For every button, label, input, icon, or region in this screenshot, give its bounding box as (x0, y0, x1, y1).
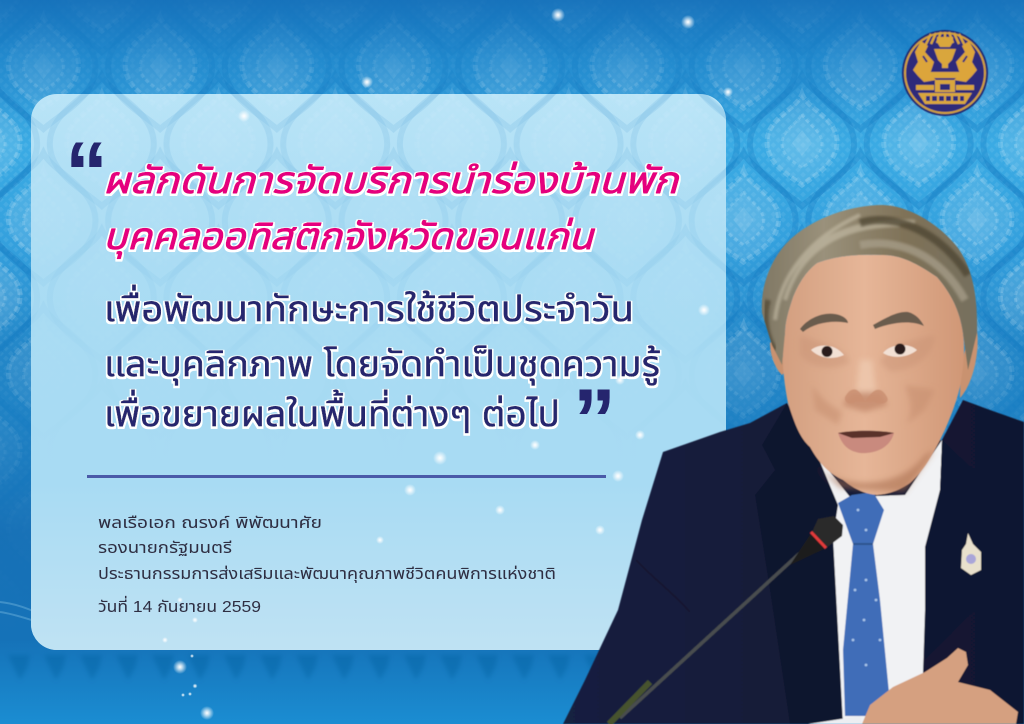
attribution text: ประธานกรรมการส่งเสริมและพัฒนาคุณภาพชีวิตคนพิการแห่งชาติ (98, 565, 556, 583)
headline in pink: ผลักดันการจัดบริการนำร่องบ้านพัก (103, 160, 680, 201)
microphone stem (620, 553, 800, 718)
seal base (916, 72, 974, 92)
lapel pin (961, 533, 981, 575)
tie knot crease (853, 543, 873, 545)
shirt cuff (808, 716, 862, 724)
seal rays (925, 32, 965, 46)
face (783, 255, 964, 495)
sleeve fold (636, 560, 690, 612)
left lapel (755, 403, 842, 724)
shirt (818, 440, 942, 724)
attribution text (98, 515, 556, 616)
headline in pink: บุคคลออทิสติกจังหวัดขอนแก่น (103, 216, 596, 259)
quote body in navy (104, 284, 660, 434)
sparkles on background (173, 8, 733, 720)
seal vase (934, 37, 956, 68)
photo: speaker (563, 200, 1024, 724)
microphone head (790, 516, 843, 565)
attribution text: วันที่ 14 กันยายน 2559 (98, 595, 261, 616)
quote body in navy: และบุคลิกภาพ โดยจัดทำเป็นชุดความรู้ (104, 343, 660, 385)
suit (563, 400, 1024, 724)
tie dots (852, 509, 881, 666)
panel: quote card (31, 94, 726, 650)
seal lions (913, 41, 936, 82)
hand (862, 648, 1018, 724)
closing quotation mark: ” (573, 372, 616, 468)
hair (761, 204, 978, 370)
attribution text: รองนายกรัฐมนตรี (98, 540, 232, 557)
quote body in navy: เพื่อพัฒนาทักษะการใช้ชีวิตประจำวัน (104, 284, 634, 329)
tie (838, 492, 890, 716)
right lapel (925, 440, 1007, 660)
headline in pink (103, 160, 680, 259)
attribution text: พลเรือเอก ณรงค์ พิพัฒนาศัย (98, 515, 322, 532)
nose (845, 389, 888, 403)
opening quotation mark: “ (65, 125, 108, 221)
eyebrows (800, 314, 848, 332)
divider line (87, 475, 606, 478)
face shading (800, 335, 935, 492)
ears (770, 330, 978, 398)
emblem: Cabinet seal (902, 30, 988, 116)
eyes (811, 346, 844, 358)
quote body in navy: เพื่อขยายผลในพื้นที่ต่างๆ ต่อไป (104, 389, 560, 434)
mouth (838, 431, 894, 453)
